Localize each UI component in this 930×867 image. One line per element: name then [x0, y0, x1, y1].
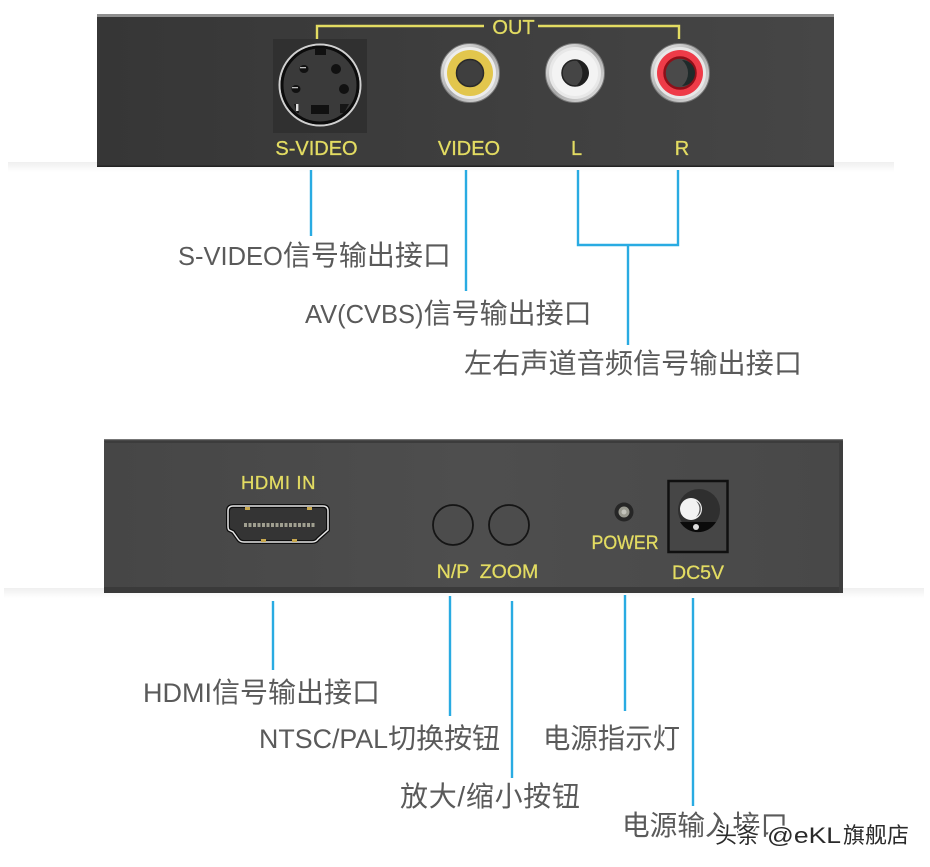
- leader line: S-VIDEO: [310, 170, 312, 236]
- label: N/P: N/P: [437, 561, 469, 583]
- label: VIDEO: VIDEO: [438, 138, 500, 160]
- label: S-VIDEO: S-VIDEO: [275, 138, 358, 160]
- label: POWER: POWER: [592, 532, 658, 554]
- icon: S-Video port: [273, 39, 367, 133]
- label: power input: 电源输入接口: [622, 810, 788, 841]
- panel: bottom device rear (inputs): [104, 439, 843, 593]
- watermark: [715, 823, 909, 848]
- label: HDMI IN: HDMI IN: [241, 472, 316, 493]
- leader line: HDMI: [272, 601, 274, 670]
- icon: yellow RCA jack: [440, 44, 500, 102]
- icon: N/P button: [433, 505, 473, 545]
- icon: HDMI port: [228, 506, 328, 542]
- floor shadow: top device: [8, 162, 894, 172]
- label: stereo audio output: 左右声道音频信号输出接口: [464, 348, 802, 379]
- label: DC5V: DC5V: [672, 562, 724, 584]
- label: ZOOM: ZOOM: [480, 561, 538, 583]
- leader line: N/P: [449, 596, 451, 716]
- label: power indicator: 电源指示灯: [543, 723, 680, 754]
- icon: white RCA jack: [546, 44, 604, 102]
- icon: red RCA jack: [650, 44, 710, 102]
- watermark: @eKL: [767, 823, 841, 848]
- label: R: R: [675, 138, 689, 160]
- leader line: DC5V: [692, 598, 694, 806]
- leader line: ZOOM: [511, 601, 513, 778]
- icon: DC power jack: [668, 481, 728, 552]
- label: zoom button: 放大/缩小按钮: [400, 781, 580, 812]
- watermark: 头条: [715, 823, 759, 848]
- OUT bracket: OUT: [492, 17, 535, 39]
- watermark: 旗舰店: [843, 823, 909, 848]
- leader line: AV: [465, 170, 467, 291]
- icon: ZOOM button: [489, 505, 529, 545]
- panel: top device rear (outputs): [97, 14, 834, 167]
- leader line: POWER: [624, 595, 626, 711]
- leader bracket: L and R audio: [578, 170, 678, 345]
- floor shadow: bottom device: [4, 588, 924, 598]
- label: NTSC/PAL switch button: NTSC/PAL切换按钮: [259, 723, 500, 754]
- label: AV output: AV(CVBS)信号输出接口: [305, 298, 592, 329]
- icon: power LED: [614, 502, 634, 522]
- label: L: L: [571, 138, 582, 160]
- OUT bracket: [317, 17, 679, 39]
- label: S-VIDEO output: S-VIDEO信号输出接口: [178, 240, 451, 271]
- label: HDMI port: HDMI信号输出接口: [143, 677, 380, 708]
